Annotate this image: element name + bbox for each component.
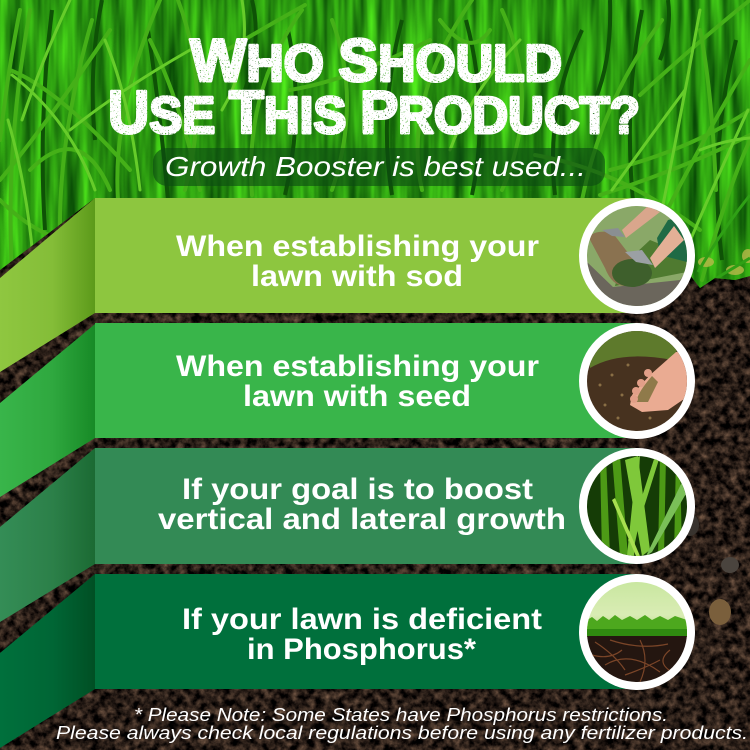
band — [95, 323, 640, 438]
footnote line 1: * Please Note: Some States have Phosphorus restrictions. — [134, 705, 668, 725]
subtitle text: Growth Booster is best used... — [165, 151, 586, 182]
band fold — [0, 574, 95, 748]
icon: grass and roots — [579, 574, 695, 690]
panel: seed — [0, 323, 695, 497]
band — [95, 574, 640, 689]
background: grass — [0, 0, 750, 300]
icon: hand with seed — [579, 323, 695, 439]
panel: sod — [0, 198, 695, 372]
band — [95, 198, 640, 313]
band text: lawn with seed — [243, 380, 471, 413]
band text: When establishing your — [176, 230, 539, 263]
band text: If your goal is to boost — [182, 473, 533, 506]
panel: growth — [0, 448, 695, 622]
title line 1: WHO SHOULD — [190, 27, 562, 94]
mid grass blades — [0, 0, 750, 280]
footnote line 2: Please always check local regulations before using any fertilizer products. — [56, 723, 748, 743]
icon: rolling out sod — [579, 198, 695, 314]
band fold — [0, 448, 95, 622]
panel: phosphorus — [0, 574, 695, 748]
title — [108, 27, 640, 146]
dead grass at roots — [698, 249, 750, 275]
dark grass blades — [43, 0, 736, 260]
band text: If your lawn is deficient — [182, 603, 542, 636]
icon: grass blades — [579, 448, 695, 564]
band fold — [0, 198, 95, 372]
subtitle pill — [153, 148, 605, 186]
band text: in Phosphorus* — [247, 633, 476, 666]
band text: vertical and lateral growth — [158, 503, 566, 536]
footnote — [56, 705, 748, 743]
band — [95, 448, 640, 564]
band text: lawn with sod — [251, 260, 463, 293]
band fold — [0, 324, 95, 497]
title line 2: USE THIS PRODUCT? — [108, 79, 640, 146]
bright grass blades — [8, 0, 750, 270]
band text: When establishing your — [176, 350, 539, 383]
